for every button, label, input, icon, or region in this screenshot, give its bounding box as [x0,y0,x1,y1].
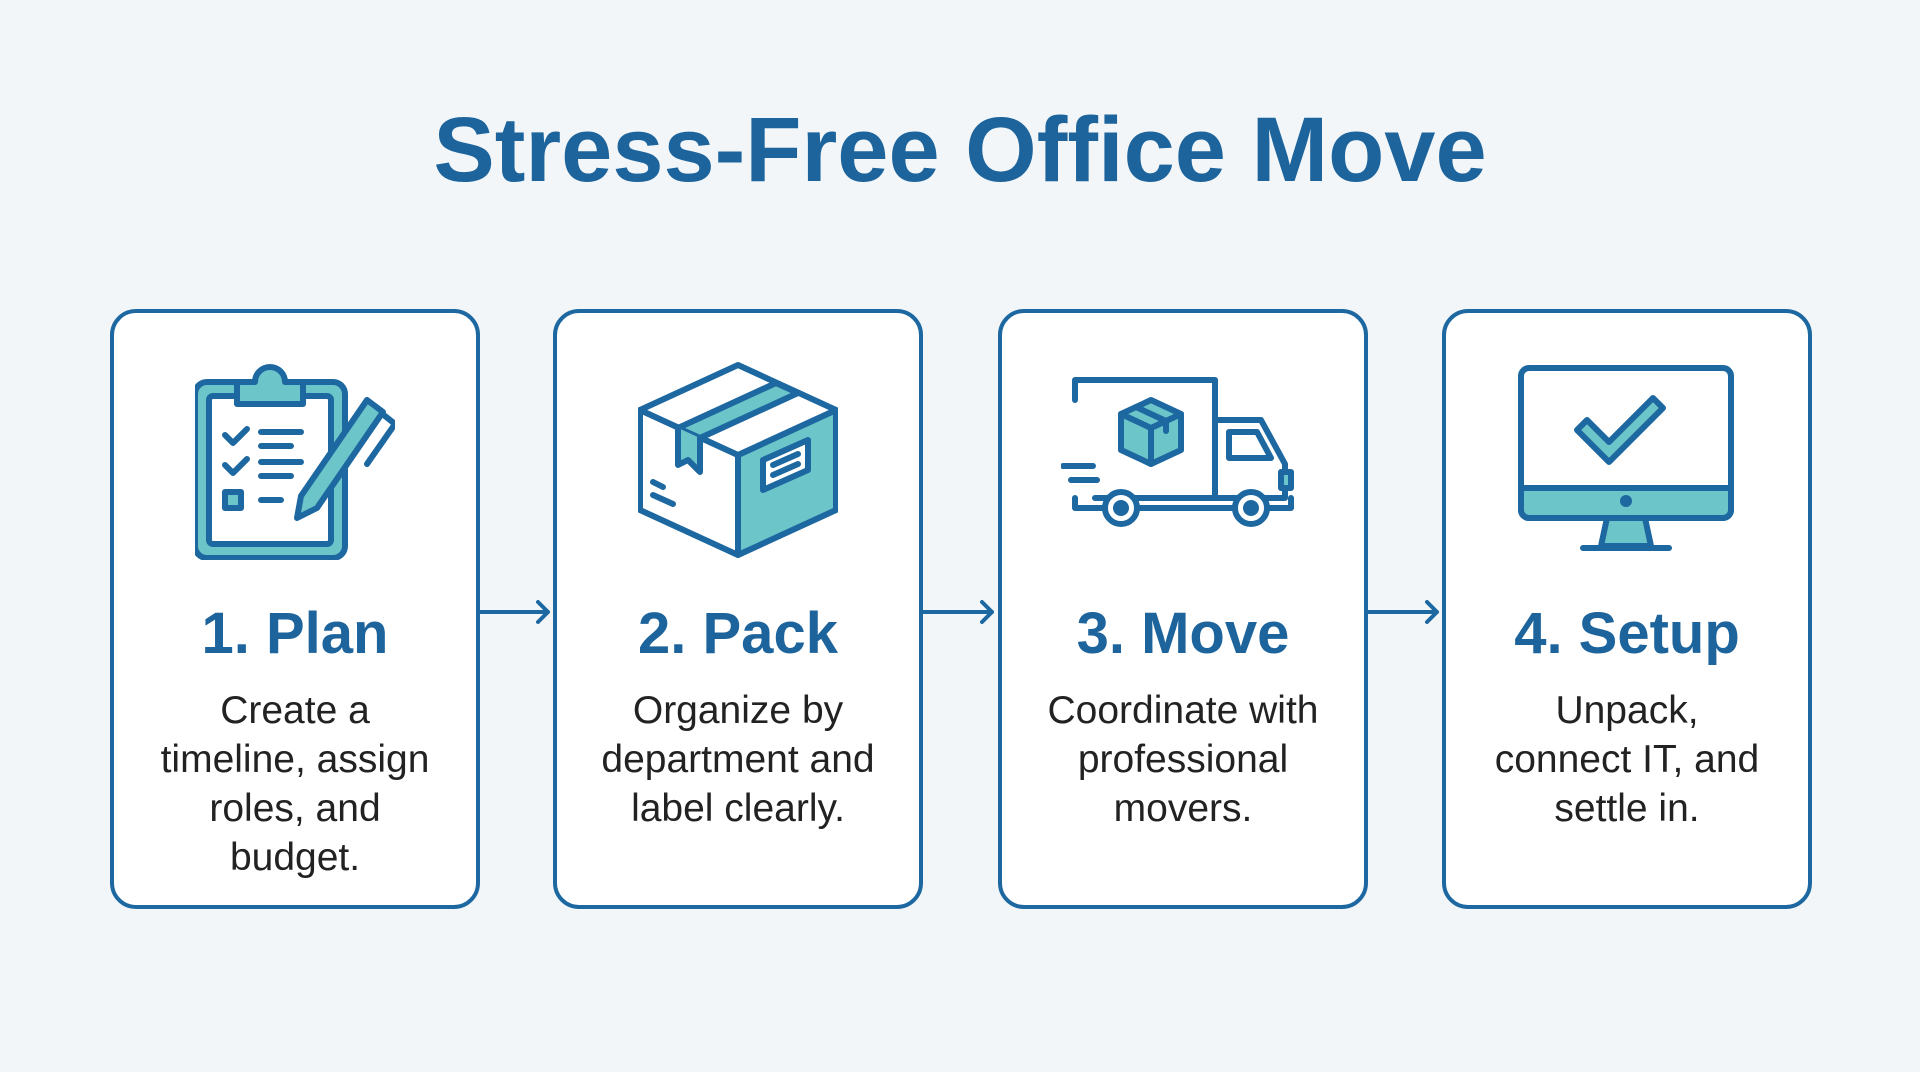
heading: 3. Move [1077,601,1289,666]
text [1048,689,1318,830]
arrow 2 [923,600,994,624]
text: label clearly. [631,787,845,830]
panel: move [998,309,1368,909]
text: roles, and [209,787,381,830]
text: Coordinate with [1048,689,1318,732]
text: connect IT, and [1495,738,1759,781]
arrow 3 [1368,600,1440,624]
panel: plan [110,309,480,909]
arrow 1 [480,600,550,624]
text: department and [601,738,875,781]
text: Organize by [633,689,843,732]
heading: 4. Setup [1514,601,1740,666]
text: professional [1078,738,1288,781]
text: settle in. [1554,787,1700,830]
text: Create a [220,689,370,732]
text: timeline, assign [161,738,429,781]
icon: monitor [1518,365,1734,551]
panel: setup [1442,309,1812,909]
text: movers. [1114,787,1252,830]
panel: pack [553,309,923,909]
icon: truck [1061,377,1294,527]
icon: box [638,362,838,558]
text: Unpack, [1555,689,1699,732]
heading: 2. Pack [638,601,838,666]
icon: clipboard [195,364,395,560]
text [601,689,875,830]
text: budget. [230,836,360,879]
text [161,689,429,879]
text [1495,689,1759,830]
title: Stress-Free Office Move [433,99,1487,201]
heading: 1. Plan [202,601,388,666]
